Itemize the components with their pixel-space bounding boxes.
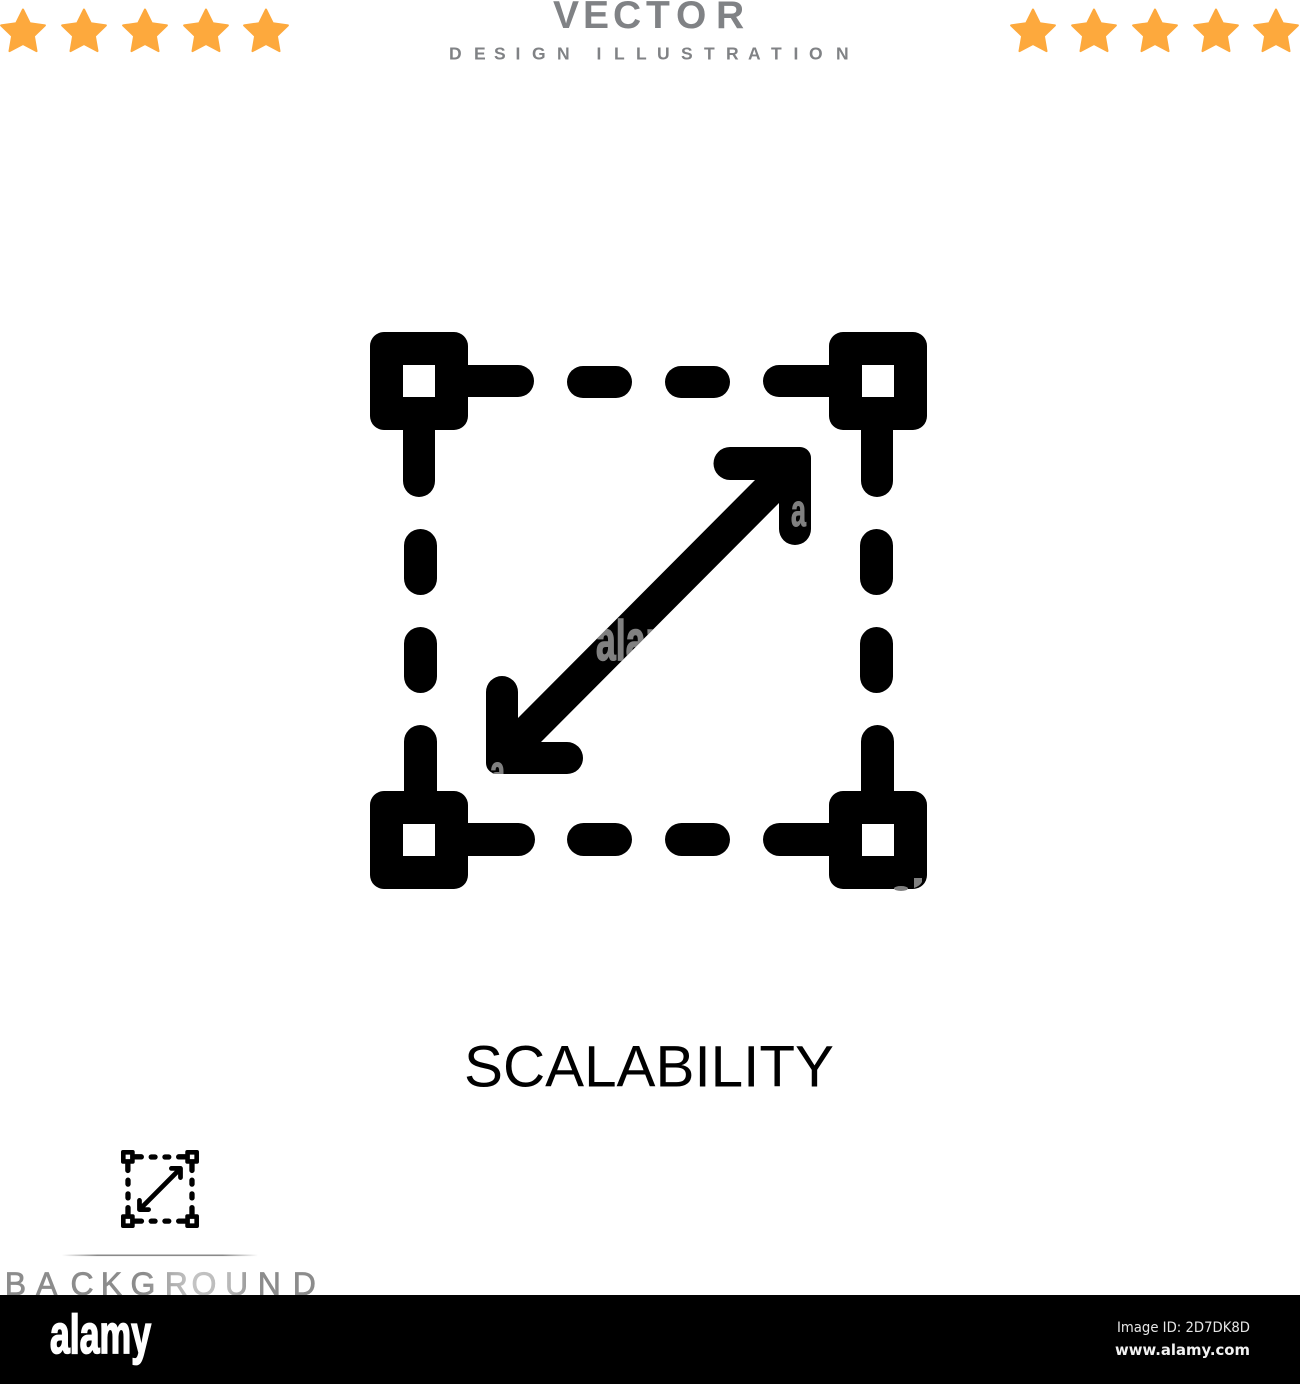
watermark fragments on icon: alamy xyxy=(596,609,697,673)
watermark fragments on icon: a xyxy=(490,746,506,797)
label: BACKGROUND: BACKGROUND xyxy=(5,1266,316,1302)
footer text: website: www.alamy.com xyxy=(1115,1341,1250,1359)
icon part: diagonal double arrow xyxy=(486,447,811,774)
icon: main scalability icon xyxy=(370,332,927,891)
header subtitle: DESIGN ILLUSTRATION: DESIGN ILLUSTRATION xyxy=(449,44,849,64)
icon part: dashed frame xyxy=(403,365,894,856)
icon: small scalability icon xyxy=(121,1150,199,1228)
watermark fragments on icon xyxy=(490,485,922,891)
right star rating xyxy=(1011,10,1298,51)
footer text: image id: Image ID: 2D7DK8D xyxy=(1117,1320,1250,1336)
left star rating xyxy=(1,10,288,51)
watermark fragments on icon: a xyxy=(791,485,807,536)
footer bar xyxy=(0,1295,1300,1384)
icon part: corner handles xyxy=(370,332,927,889)
heading: SCALABILITY: SCALABILITY xyxy=(464,1034,834,1100)
divider line above BACKGROUND xyxy=(62,1254,258,1256)
footer logo: alamy: alamy xyxy=(50,1303,151,1365)
